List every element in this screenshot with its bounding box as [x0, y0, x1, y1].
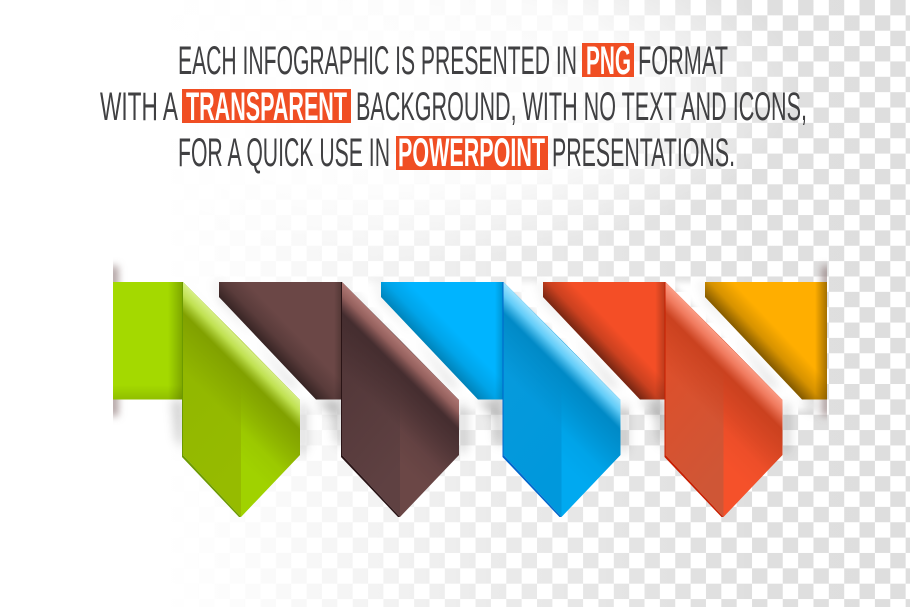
heading text	[100, 39, 807, 175]
ribbon graphic	[109, 266, 831, 517]
panel: yellow back	[705, 282, 827, 400]
line 3: FOR A QUICK USE IN	[178, 131, 390, 175]
line 1: EACH INFOGRAPHIC IS PRESENTED IN	[178, 39, 577, 83]
fold: blue	[502, 282, 620, 517]
line 2: WITH A	[100, 85, 178, 129]
white halos behind diagonal gaps	[190, 282, 822, 410]
panel: green back	[113, 282, 183, 400]
panel: brown back	[219, 282, 342, 400]
panel: blue back	[381, 282, 503, 400]
band end shadows	[109, 266, 831, 416]
line 3: PRESENTATIONS.	[552, 131, 735, 175]
fold: red	[664, 282, 782, 517]
fold: brown	[341, 282, 459, 517]
line 1: FORMAT	[638, 39, 728, 83]
panel: red back	[543, 282, 665, 400]
line 2: TRANSPARENT	[186, 85, 347, 129]
line 3: POWERPOINT	[398, 131, 545, 175]
fold: green	[182, 282, 300, 517]
soft cast shadows	[172, 282, 815, 455]
line 2	[100, 85, 807, 129]
line 1: PNG	[586, 39, 631, 83]
